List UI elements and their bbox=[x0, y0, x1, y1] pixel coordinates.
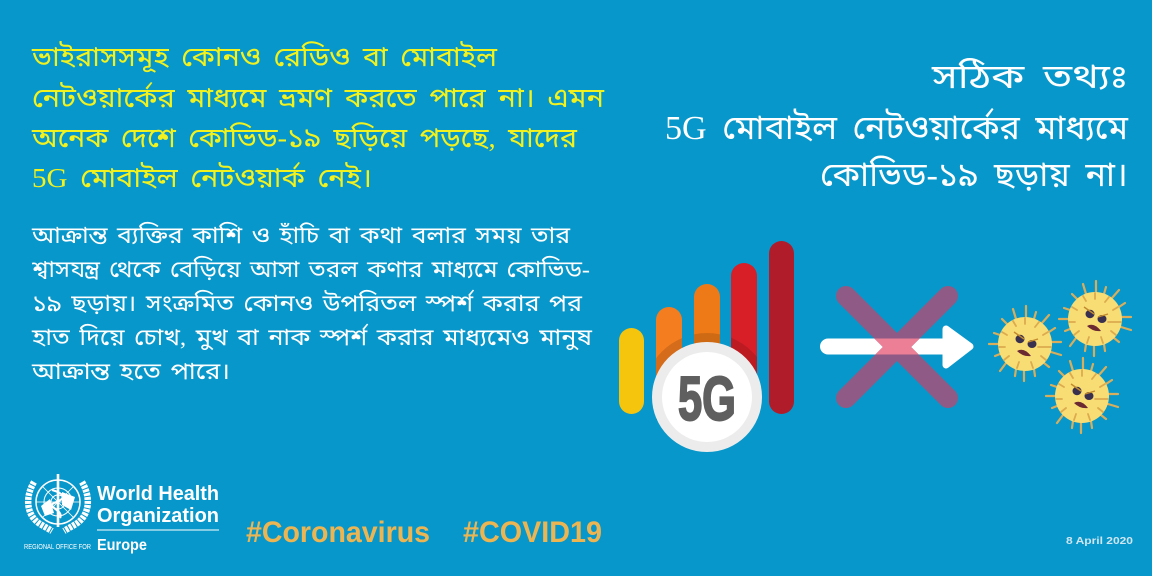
hashtags: #COVID19 bbox=[463, 516, 602, 549]
heading: fact statement bbox=[665, 58, 1129, 194]
logo: WHO Regional Office for Europe: Organization bbox=[97, 505, 219, 527]
hashtags: #Coronavirus bbox=[246, 516, 430, 549]
text block: yellow key message bbox=[31, 41, 605, 193]
logo: WHO Regional Office for Europe: REGIONAL OFFICE FOR bbox=[24, 542, 91, 551]
icon: crossed out arrow bbox=[828, 296, 970, 398]
hashtags bbox=[246, 516, 602, 549]
icon: 5G signal bars bbox=[619, 241, 794, 461]
logo: WHO Regional Office for Europe bbox=[24, 474, 219, 554]
logo: WHO Regional Office for Europe: Europe bbox=[97, 537, 147, 554]
heading: fact statement: 5G মোবাইল নেটওয়ার্কের মাধ্যমে bbox=[665, 108, 1129, 147]
text block: yellow key message: অনেক দেশে কোভিড-১৯ ছড়িয়ে পড়ছে, যাদের bbox=[31, 122, 578, 153]
text block: white explanation: ১৯ ছড়ায়। সংক্রমিত কোনও উপরিতল স্পর্শ করার পর bbox=[32, 290, 582, 316]
text block: white explanation bbox=[31, 223, 593, 384]
icon: WHO emblem bbox=[28, 474, 88, 531]
heading: fact statement: কোভিড-১৯ ছড়ায় না। bbox=[820, 155, 1128, 194]
date: 8 April 2020 bbox=[1066, 536, 1134, 547]
text block: white explanation: হাত দিয়ে চোখ, মুখ বা নাক স্পর্শ করার মাধ্যমেও মানুষ bbox=[31, 324, 593, 351]
text block: white explanation: শ্বাসযন্ত্র থেকে বেড়িয়ে আসা তরল কণার মাধ্যমে কোভিড- bbox=[31, 257, 590, 282]
text block: yellow key message: ভাইরাসসমূহ কোনও রেডিও বা মোবাইল bbox=[31, 41, 497, 73]
logo: WHO Regional Office for Europe: World Health bbox=[97, 483, 219, 505]
heading: fact statement: সঠিক তথ্যঃ bbox=[931, 58, 1128, 96]
icon: three virus particles bbox=[989, 281, 1131, 433]
text block: white explanation: আক্রান্ত ব্যক্তির কাশি ও হাঁচি বা কথা বলার সময় তার bbox=[31, 223, 570, 248]
text block: white explanation: আক্রান্ত হতে পারে। bbox=[31, 359, 230, 384]
text block: yellow key message: নেটওয়ার্কের মাধ্যমে ভ্রমণ করতে পারে না। এমন bbox=[32, 81, 605, 113]
text block: yellow key message: 5G মোবাইল নেটওয়ার্ক নেই। bbox=[32, 161, 372, 193]
icon: 5G signal bars: 5G bbox=[678, 365, 736, 434]
